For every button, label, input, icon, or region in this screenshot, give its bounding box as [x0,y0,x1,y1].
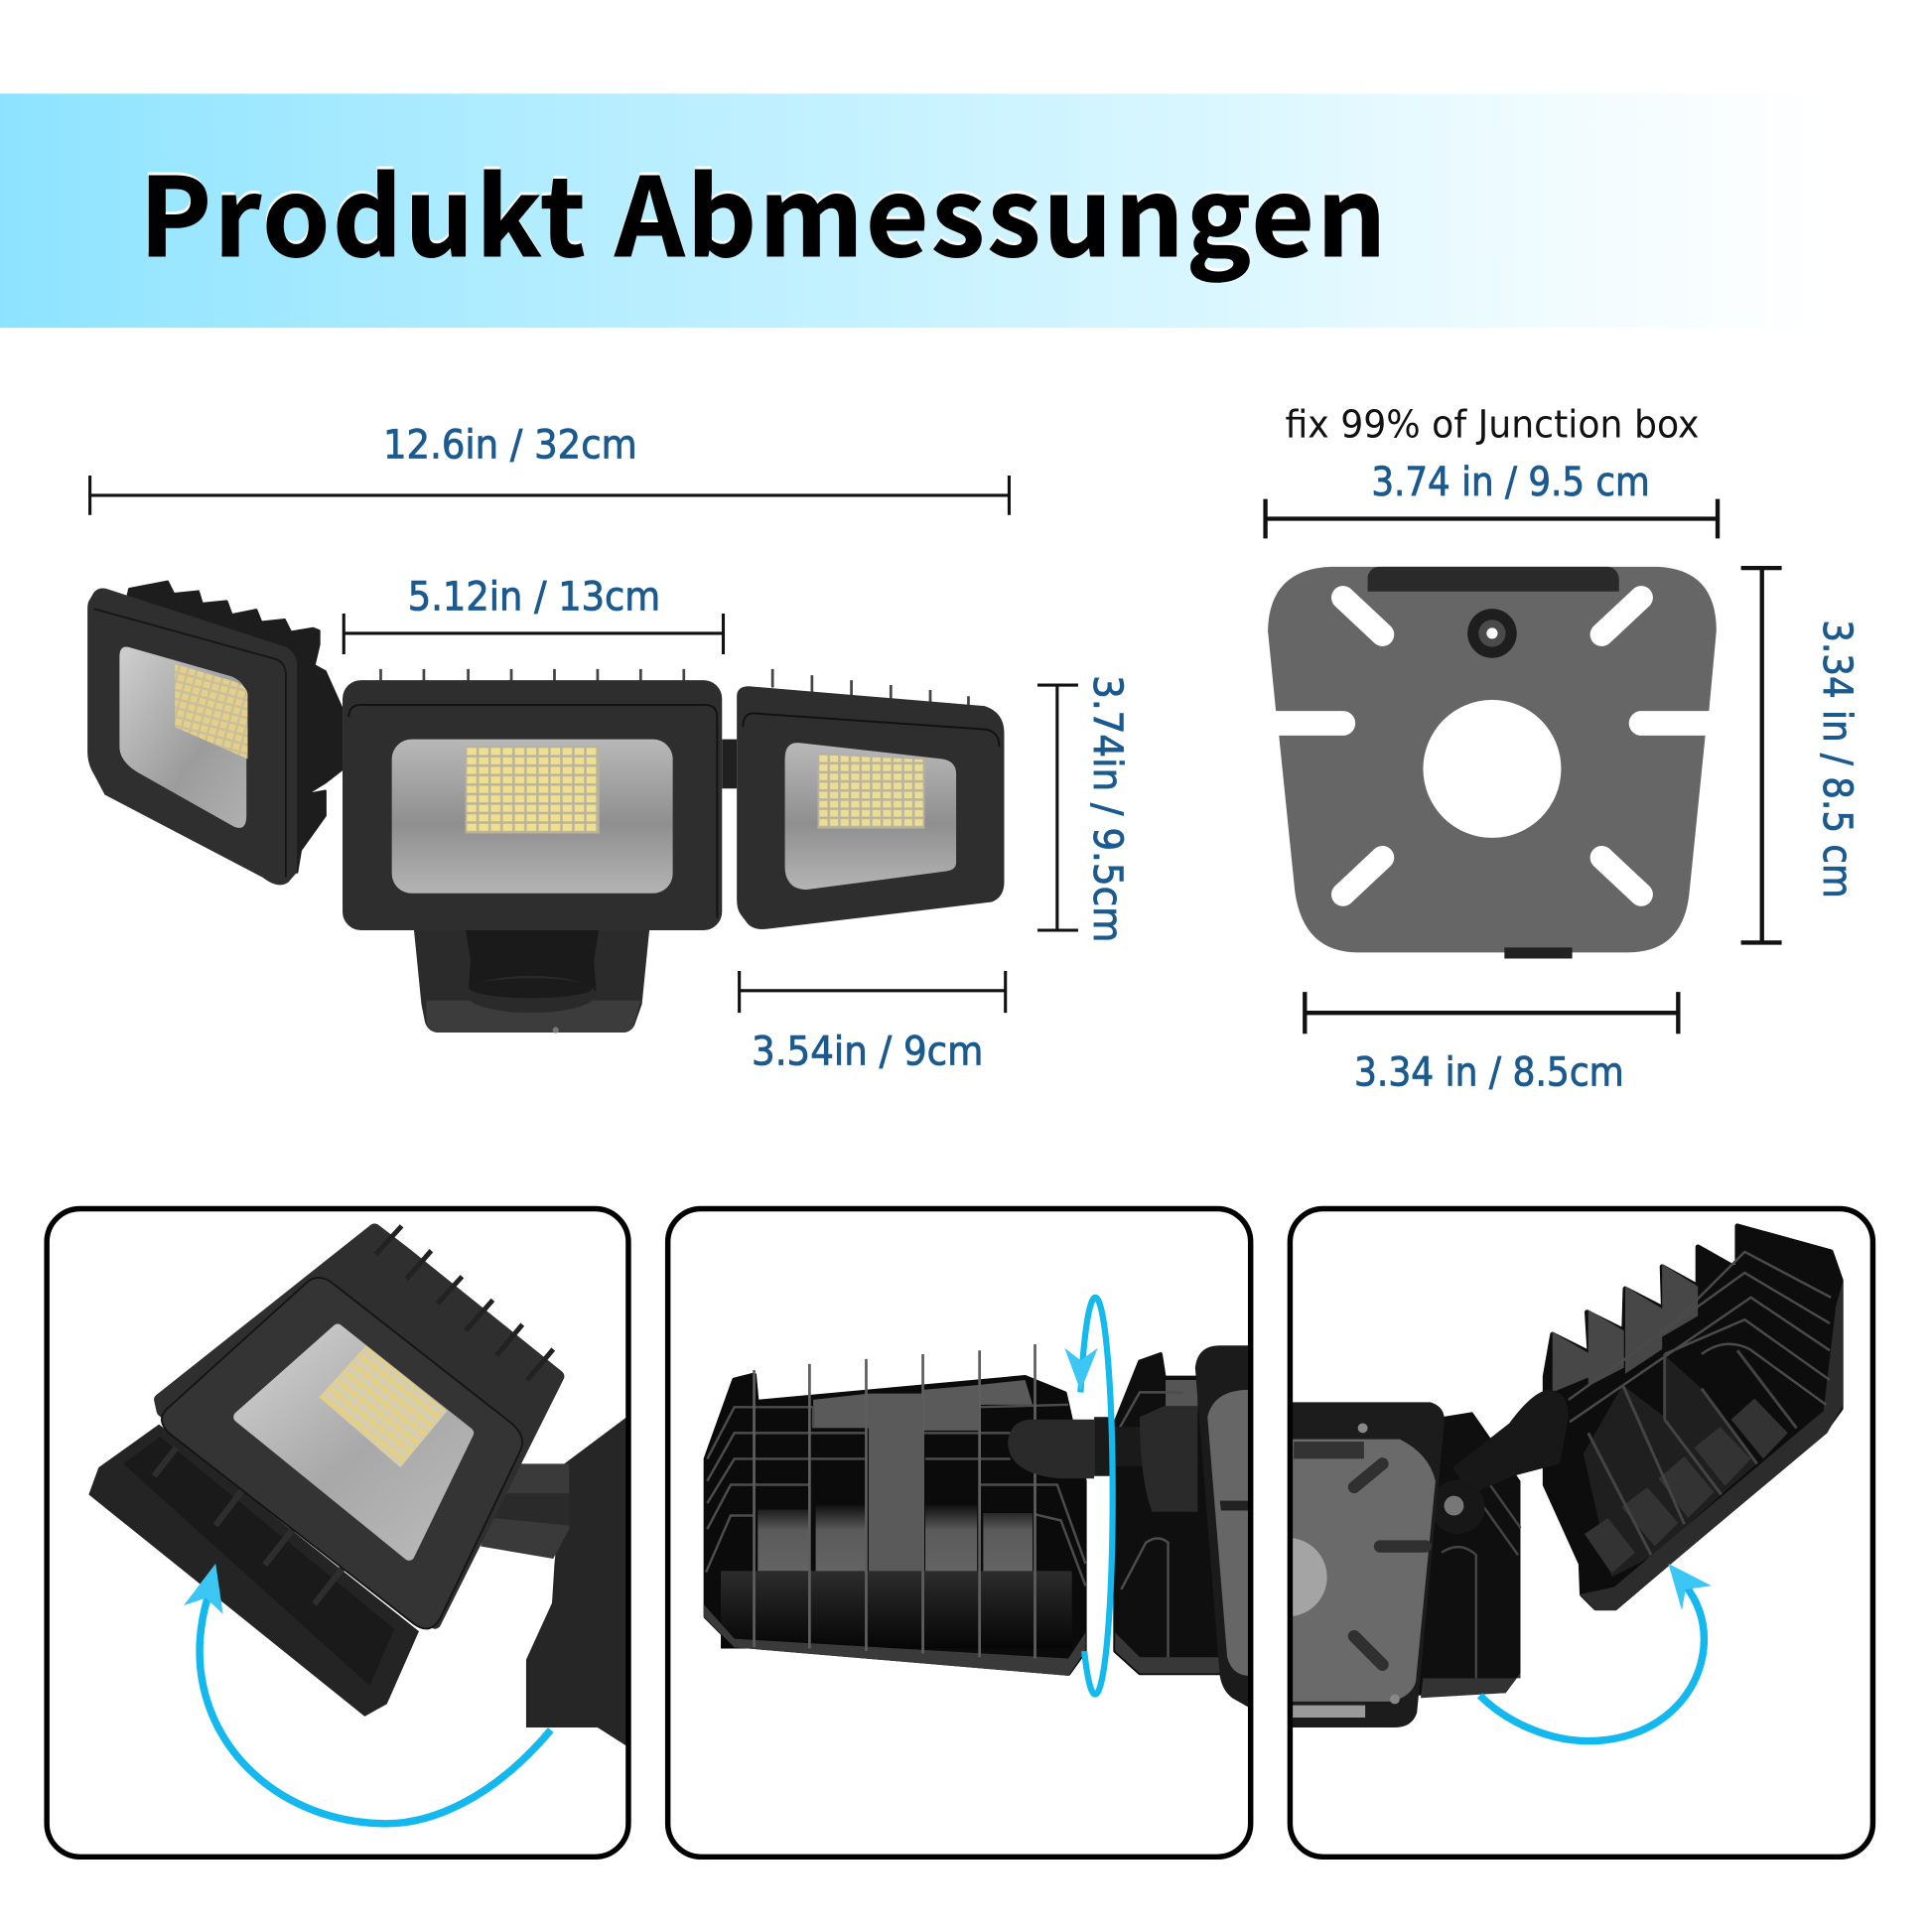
left lamp head [87,582,342,885]
panel: vertical rotation [1248,1208,1872,1857]
screw pivot [1444,1480,1485,1515]
mounting plate [1268,567,1717,959]
bottom tab [1504,947,1573,959]
front plate [1195,1345,1249,1708]
rotation arrow [184,1564,551,1824]
centre lamp spikes [380,669,684,685]
dimension: side lamp width: 3.54in / 9cm [752,1029,983,1074]
lamp spikes [376,1226,553,1380]
dimension: centre lamp width [344,574,724,654]
header band [0,93,1932,328]
top tab [1368,567,1619,592]
dimension: side lamp width [740,971,1006,1074]
right lamp spikes [772,669,968,719]
lamp body [160,1230,558,1622]
product: three-head flood light [87,582,1004,1034]
rotation arrow [1480,1564,1712,1741]
dimension: overall width [90,423,1009,515]
swivel arm [1452,1390,1569,1494]
panel: horizontal rotation [668,1208,1251,1857]
dimension: overall width: 12.6in / 32cm [383,423,637,469]
dimension: plate height [1741,568,1860,942]
dimension: plate bottom width: 3.34 in / 8.5cm [1354,1049,1624,1095]
rotation arrow [1064,1298,1113,1695]
rear of lamp [704,1344,1085,1676]
centre lamp head [343,680,722,930]
dimension: plate top width: 3.74 in / 9.5 cm [1371,460,1650,505]
dimension: plate top width [1266,460,1718,538]
dimension: plate bottom width [1305,992,1678,1095]
pivot joint [1008,1406,1197,1512]
dimension: centre lamp width: 5.12in / 13cm [408,574,660,620]
dimension: plate height: 3.34 in / 8.5 cm [1814,620,1860,898]
lamp face [162,1278,522,1629]
front mounting plate [1293,1402,1445,1727]
lower lamp rear [1417,1412,1520,1698]
lens [239,1329,469,1555]
title: Produkt Abmessungen [138,127,1387,284]
arm [481,1463,569,1559]
mount arm [414,930,649,1034]
dimension: lamp height [1037,675,1130,942]
rear housing [88,1425,419,1717]
LED array [319,1345,448,1467]
joint [722,740,737,788]
junction box caption: fix 99% of Junction box [1285,403,1699,448]
second lamp rear [1115,1354,1232,1673]
right lamp head [737,686,1004,929]
upper lamp rear [1545,1226,1844,1610]
title: Produkt Abmessungen [139,131,1386,288]
dimension: lamp height: 3.74in / 9.5cm [1084,675,1130,942]
wall mount [526,1416,628,1747]
panel: tilt rotation [47,1208,628,1857]
screw boss [1467,609,1517,658]
